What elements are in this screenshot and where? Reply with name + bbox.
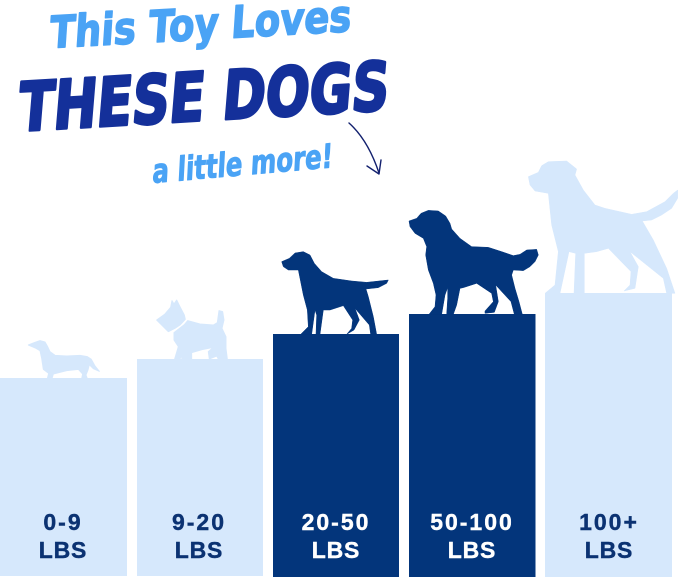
bar: 0-9 lbs: 0-9 bbox=[43, 509, 83, 535]
bar: 0-9 lbs: LBS bbox=[39, 537, 87, 563]
bar: 9-20 lbs: 9-20 bbox=[172, 509, 226, 535]
bar: 100+ lbs: 100+ bbox=[579, 509, 639, 535]
bar: 50-100 lbs bbox=[409, 314, 536, 577]
bar: 50-100 lbs: LBS bbox=[448, 537, 496, 563]
bar: 50-100 lbs: 50-100 bbox=[430, 509, 514, 535]
bar: 0-9 lbs bbox=[0, 378, 127, 576]
icon: labrador silhouette medium bbox=[282, 252, 388, 334]
bar: 20-50 lbs: LBS bbox=[312, 537, 360, 563]
arrow pointing to dogs bbox=[349, 123, 381, 174]
bar: 100+ lbs bbox=[545, 293, 672, 577]
bar: 9-20 lbs: LBS bbox=[175, 537, 223, 563]
title line: THESE DOGS: THESE DOGS bbox=[16, 48, 392, 147]
icon: dachshund silhouette bbox=[28, 341, 99, 379]
bar: 20-50 lbs: 20-50 bbox=[302, 509, 370, 535]
bar: 20-50 lbs bbox=[273, 334, 399, 577]
bar: 9-20 lbs bbox=[137, 359, 263, 576]
title line: a little more!: a little more! bbox=[152, 136, 334, 191]
icon: golden retriever silhouette bbox=[409, 210, 538, 314]
bar: 100+ lbs: LBS bbox=[585, 537, 633, 563]
icon: large labrador silhouette bbox=[528, 161, 678, 293]
icon: scottie silhouette bbox=[157, 300, 227, 359]
